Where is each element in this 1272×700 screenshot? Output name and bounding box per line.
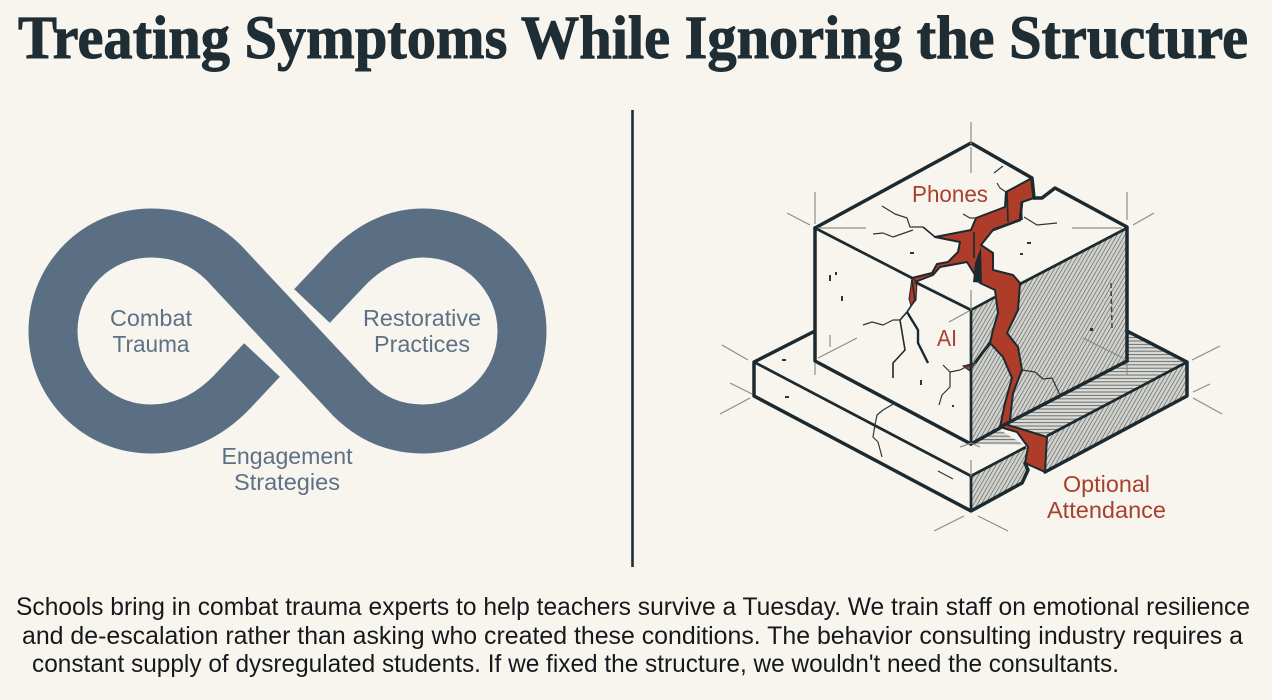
base hatched front faces (971, 362, 1187, 511)
label: engagement strategies: Strategies (234, 469, 340, 495)
label: restorative practices: Restorative (363, 305, 481, 331)
body text: and de-escalation rather than asking who created these conditions. The behavior consulting industry requires a (22, 622, 1243, 650)
label: engagement strategies: Engagement (222, 443, 353, 469)
label: optional attendance (1047, 471, 1166, 523)
label: phones: Phones (912, 181, 988, 207)
label: optional attendance: Attendance (1047, 497, 1166, 523)
label: combat trauma (110, 305, 193, 357)
block hatched right face (971, 228, 1127, 444)
block and base outlines (754, 143, 1187, 511)
icon: infinity symbol (53, 233, 522, 429)
label: restorative practices (363, 305, 481, 357)
vertical divider (631, 110, 634, 567)
body text: Schools bring in combat trauma experts to help teachers survive a Tuesday. We train staff on emotional resilience (16, 593, 1250, 621)
label: optional attendance: Optional (1063, 471, 1150, 497)
label: restorative practices: Practices (374, 331, 470, 357)
dark crack branches on left face (893, 280, 990, 378)
label: combat trauma: Trauma (112, 331, 190, 357)
base hatched top surface (971, 331, 1187, 444)
fracture: left face red sliver (909, 278, 917, 306)
panel: cracked isometric block (720, 122, 1222, 531)
label: AI: AI (937, 325, 957, 351)
fracture: small red chip (963, 363, 975, 371)
construction guide lines (720, 122, 1222, 531)
body text: constant supply of dysregulated students. If we fixed the structure, we wouldn't need the consultants. (32, 650, 1119, 678)
base small hatched top patch (971, 430, 1024, 445)
speckle marks (782, 166, 1112, 479)
label: engagement strategies (222, 443, 353, 495)
fracture: inner wall lines (923, 192, 1022, 258)
fracture in red (912, 178, 1047, 472)
body text (16, 593, 1250, 678)
inner edges (754, 202, 1187, 511)
label: combat trauma: Combat (110, 305, 193, 331)
title: Treating Symptoms While Ignoring the Structure (18, 5, 1248, 72)
hairline cracks (863, 183, 1060, 457)
fracture: dark inner wall (973, 247, 982, 283)
panel: infinity loop (53, 233, 522, 495)
